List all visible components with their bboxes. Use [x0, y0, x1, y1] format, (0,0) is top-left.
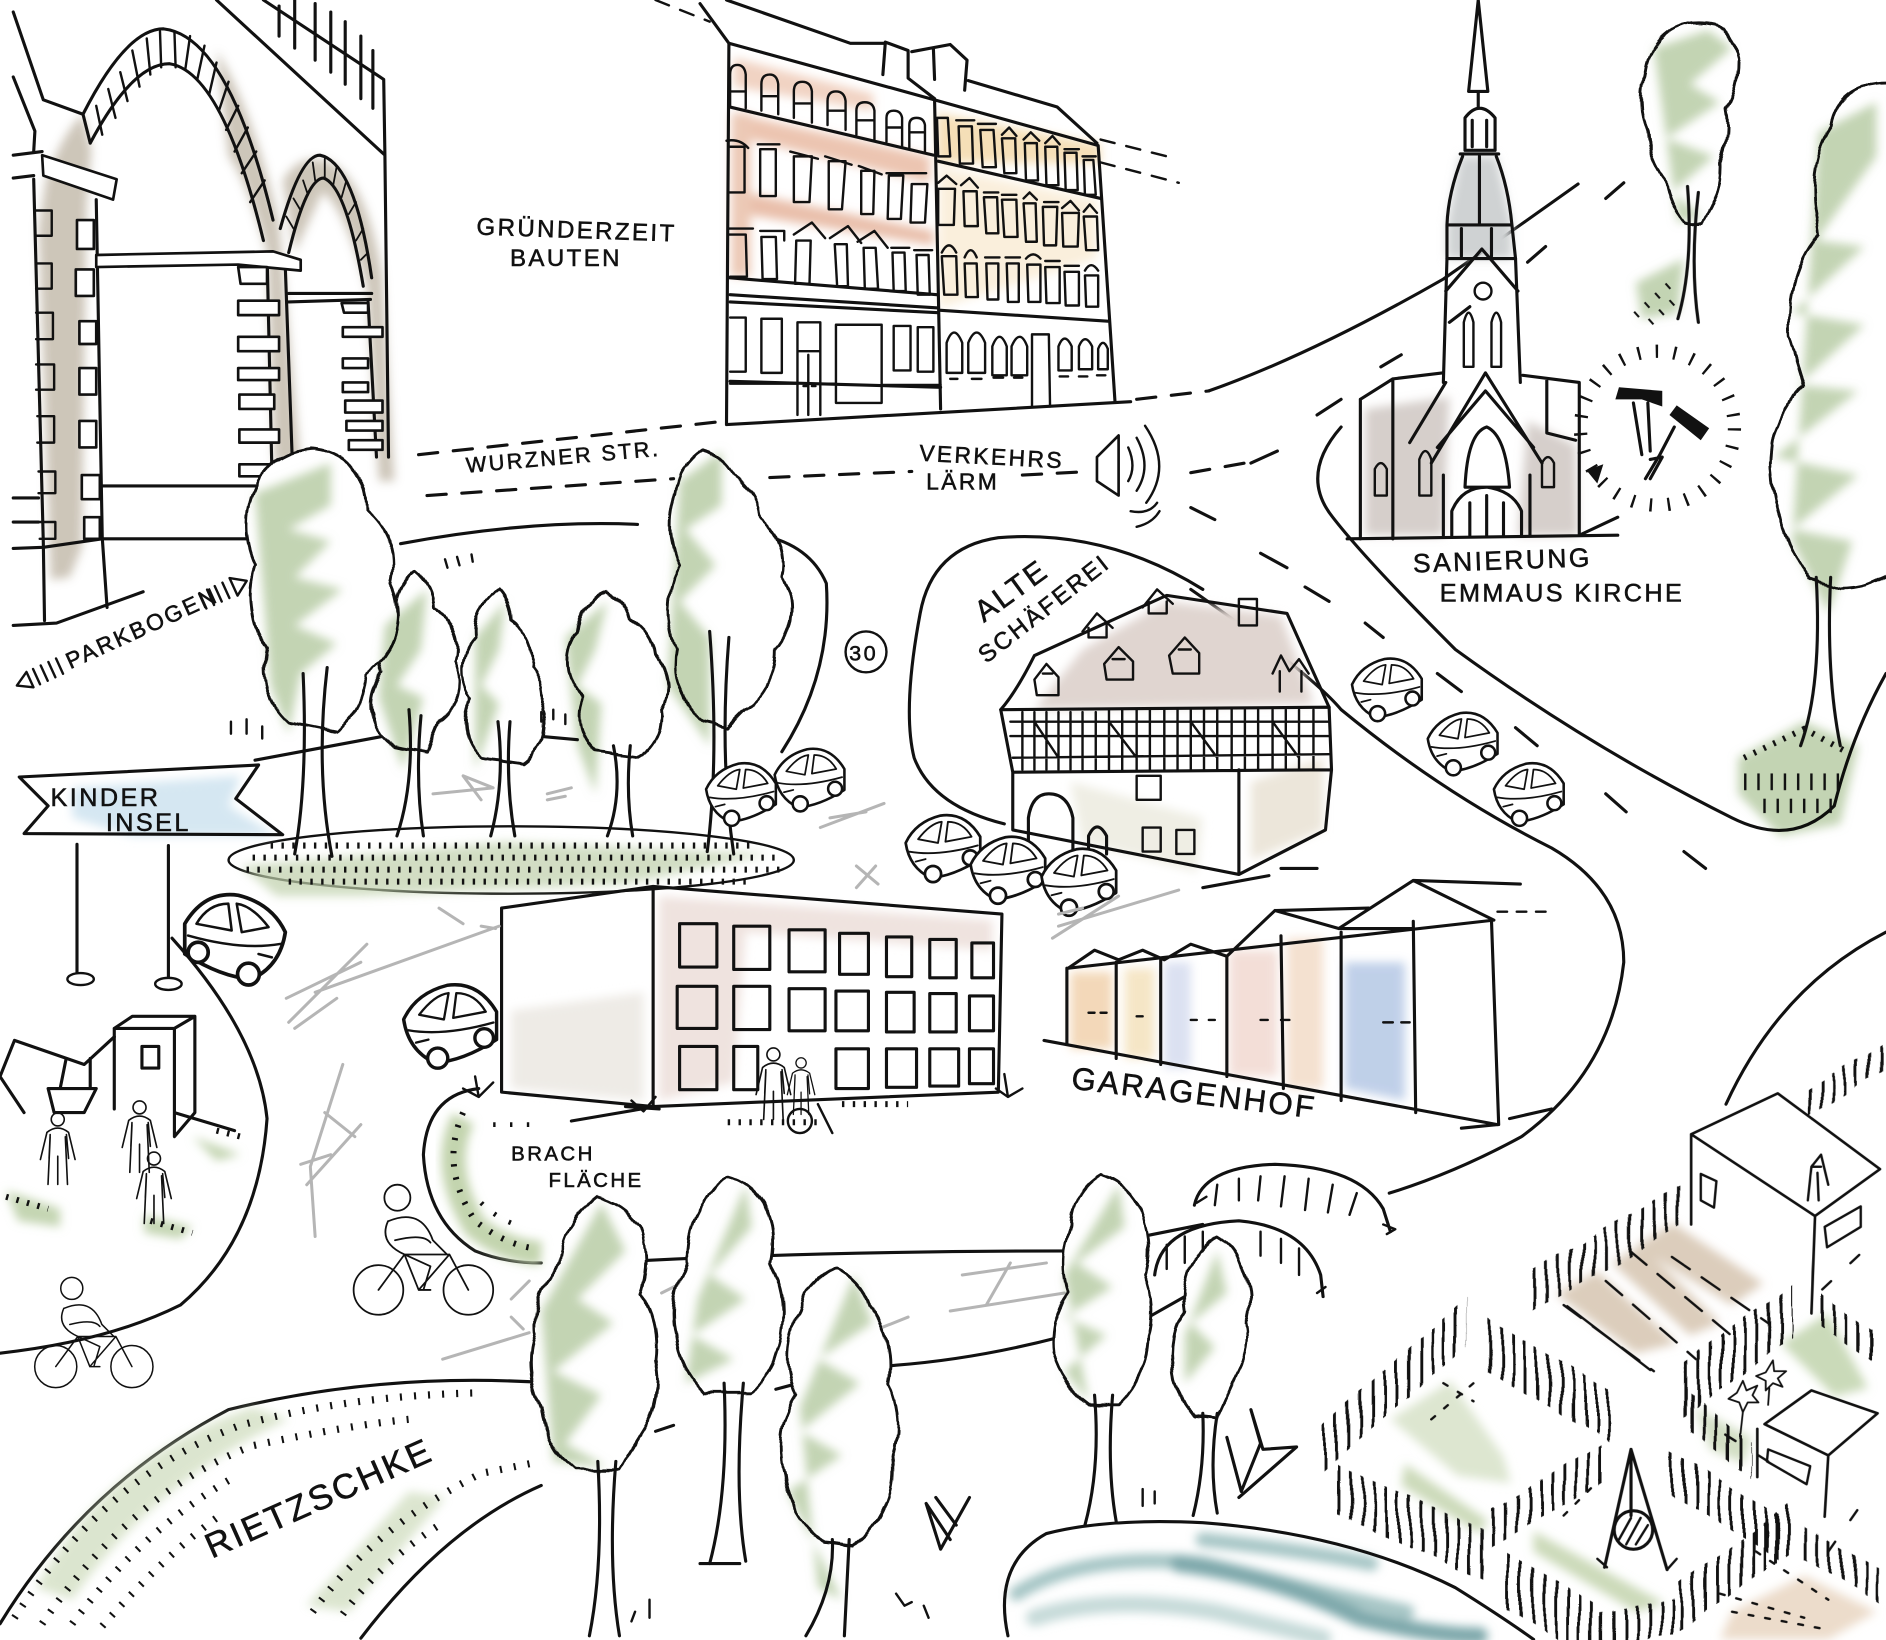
house small	[1757, 1390, 1878, 1517]
church ground	[1347, 517, 1618, 539]
garage bays	[1044, 920, 1552, 1128]
grass tufts	[463, 1074, 1022, 1111]
tree 5 crown	[1172, 1236, 1250, 1419]
play house	[114, 1016, 235, 1137]
upper road edge	[1209, 184, 1578, 391]
tree 1 crown	[531, 1197, 658, 1470]
panel: right edge poplar	[1738, 84, 1886, 836]
panel: bottom trees	[531, 1174, 1250, 1636]
tree: left large	[246, 449, 398, 731]
speed limit sign 30	[846, 631, 886, 672]
green washes	[541, 1185, 1227, 1600]
tree 3 crown	[781, 1269, 897, 1546]
crown	[1770, 84, 1886, 589]
people	[40, 1101, 171, 1223]
label: Sanierung Emmaus Kirche: EMMAUS KIRCHE	[1440, 579, 1684, 607]
tree 4 crown	[1052, 1174, 1152, 1405]
green wash	[1636, 30, 1732, 319]
panel: top right tree	[1636, 22, 1738, 322]
block outline	[502, 886, 1002, 1121]
panel: Rietzschke stream	[14, 1393, 541, 1626]
tower	[1443, 249, 1520, 382]
nave	[1360, 373, 1579, 539]
tree: fourth	[567, 592, 667, 758]
hammer	[1615, 387, 1662, 407]
right ground floor	[947, 333, 1108, 407]
flowers	[1728, 1360, 1786, 1412]
dashed ring	[1580, 351, 1734, 505]
icon: signature marks	[926, 1410, 1297, 1549]
label: Parkbogen: PARKBOGEN	[61, 582, 222, 674]
label: Sanierung Emmaus Kirche: SANIERUNG	[1412, 542, 1592, 579]
tree trunks	[589, 1383, 1217, 1636]
hedge wash	[453, 1119, 541, 1253]
door washes	[1070, 938, 1405, 1101]
small arch	[280, 155, 372, 286]
icon: pedestrian and wheelchair user	[756, 1048, 832, 1133]
timbered band	[1001, 707, 1332, 874]
icon: bridge upper	[1194, 1164, 1395, 1234]
lower right road curve	[1318, 427, 1886, 830]
facade washes	[731, 58, 1101, 308]
building washes	[1034, 601, 1323, 872]
label: Alte Schäferei: ALTE	[969, 553, 1055, 629]
big arch	[83, 29, 273, 241]
meadow ellipse	[229, 826, 794, 894]
roofline	[1068, 880, 1520, 968]
quoins	[36, 210, 55, 539]
car group: under trees	[706, 749, 844, 826]
church windows	[1375, 451, 1554, 496]
label: Verkehrslärm: VERKEHRS	[919, 440, 1065, 473]
impost and beams	[42, 155, 301, 271]
garden path dashes	[1564, 1251, 1768, 1371]
car group: Schäferei yard	[906, 815, 1116, 916]
gray scribbles	[286, 776, 1179, 1359]
hedge dashes	[453, 1113, 535, 1248]
label: Sanierung Emmaus Kirche	[1412, 542, 1684, 607]
left house windows	[730, 65, 925, 152]
panel: central block building	[463, 886, 1022, 1122]
washes	[1390, 1223, 1876, 1639]
arch wash	[39, 51, 395, 580]
panel: Brachfläche hedge	[453, 1113, 541, 1253]
panel: pond	[1004, 1522, 1534, 1639]
panel: gründerzeit houses	[656, 0, 1179, 425]
grass	[1744, 729, 1846, 758]
meadow washes	[6, 1137, 241, 1239]
label: Verkehrslärm	[919, 440, 1065, 495]
dashed road lines	[419, 391, 1245, 496]
panel: Garagenhof	[1044, 880, 1552, 1128]
banner	[19, 765, 283, 835]
trunk	[1801, 577, 1840, 746]
label: Brachfläche: BRACH	[511, 1143, 595, 1166]
street dashes	[656, 0, 1179, 183]
tree: fifth	[668, 450, 791, 728]
icon: cyclist centre	[354, 1185, 493, 1315]
grass	[6, 1131, 241, 1233]
tree 2 crown	[674, 1176, 783, 1393]
right house windows	[937, 118, 1096, 195]
car group: road right	[1352, 659, 1564, 826]
crown	[1642, 22, 1738, 223]
speed limit sign 30: 30	[849, 640, 878, 665]
walls and roof	[13, 0, 389, 457]
panel: parkbogen arches	[13, 0, 395, 625]
icon: renovation tools	[1580, 351, 1734, 505]
label: Brachfläche	[511, 1143, 644, 1192]
dome	[1447, 154, 1516, 259]
icon: bridge lower	[1155, 1221, 1325, 1297]
panel: Kinderinsel sign: INSEL	[106, 809, 191, 837]
panel: allotment gardens	[1323, 1058, 1882, 1639]
heading: Gründerzeit Bauten: BAUTEN	[510, 245, 622, 272]
water wash	[1016, 1540, 1479, 1638]
banner text: KINDER	[51, 784, 160, 812]
grass	[1636, 283, 1674, 322]
label: Wurzner Str.: WURZNER STR.	[465, 436, 661, 478]
panel: Emmaus church	[1347, 0, 1618, 539]
label: Brachfläche: FLÄCHE	[548, 1169, 644, 1192]
swing frame	[0, 1037, 114, 1113]
large central road	[1191, 589, 1624, 1193]
spire	[1465, 0, 1495, 150]
icon: big car left	[185, 895, 285, 985]
trunk	[1678, 186, 1698, 322]
portal and door	[1452, 427, 1522, 535]
teepee	[1605, 1449, 1667, 1570]
label: Garagenhof: GARAGENHOF	[1070, 1061, 1318, 1126]
icon: big car by block	[404, 985, 497, 1068]
panel: Kinderinsel sign	[19, 765, 283, 990]
building outline	[700, 0, 1131, 425]
pond outline	[1004, 1522, 1534, 1639]
heading: Gründerzeit Bauten	[476, 214, 677, 272]
dormers	[1034, 589, 1309, 695]
label: Parkbogen	[11, 568, 252, 697]
tree: second	[371, 571, 459, 752]
windows	[677, 924, 994, 1090]
fence hatching	[1323, 1058, 1882, 1635]
left ground floor	[730, 318, 941, 415]
icon: cyclist left	[35, 1277, 153, 1388]
panel: tree row in the park	[229, 449, 794, 896]
panel: playground	[0, 1016, 241, 1239]
green washes	[255, 451, 722, 794]
building washes	[511, 896, 992, 1101]
tree trunks	[295, 631, 734, 856]
label: Rietzschke: RIETZSCHKE	[199, 1431, 439, 1566]
roller	[1669, 405, 1709, 440]
church wash	[1365, 156, 1578, 535]
door handles	[1089, 1013, 1410, 1022]
arrow	[1586, 464, 1603, 484]
green wash	[1738, 102, 1876, 836]
icon: speaker	[1097, 426, 1160, 527]
door and windows	[1028, 794, 1107, 854]
grass dots	[14, 1393, 481, 1618]
grass ticks	[631, 1489, 1155, 1621]
panel: Alte Schäferei building	[1001, 589, 1332, 888]
posts	[77, 844, 168, 977]
piers	[34, 179, 376, 621]
label: Alte Schäferei: SCHÄFEREI	[973, 549, 1116, 669]
roof	[1001, 595, 1329, 710]
label: Verkehrslärm: LÄRM	[926, 469, 999, 495]
green washes	[36, 1407, 445, 1612]
grass ticks	[231, 554, 565, 739]
tree: third	[463, 589, 544, 764]
heading: Gründerzeit Bauten: GRÜNDERZEIT	[476, 214, 677, 248]
banner wash	[72, 776, 277, 836]
house large	[1691, 1093, 1880, 1313]
